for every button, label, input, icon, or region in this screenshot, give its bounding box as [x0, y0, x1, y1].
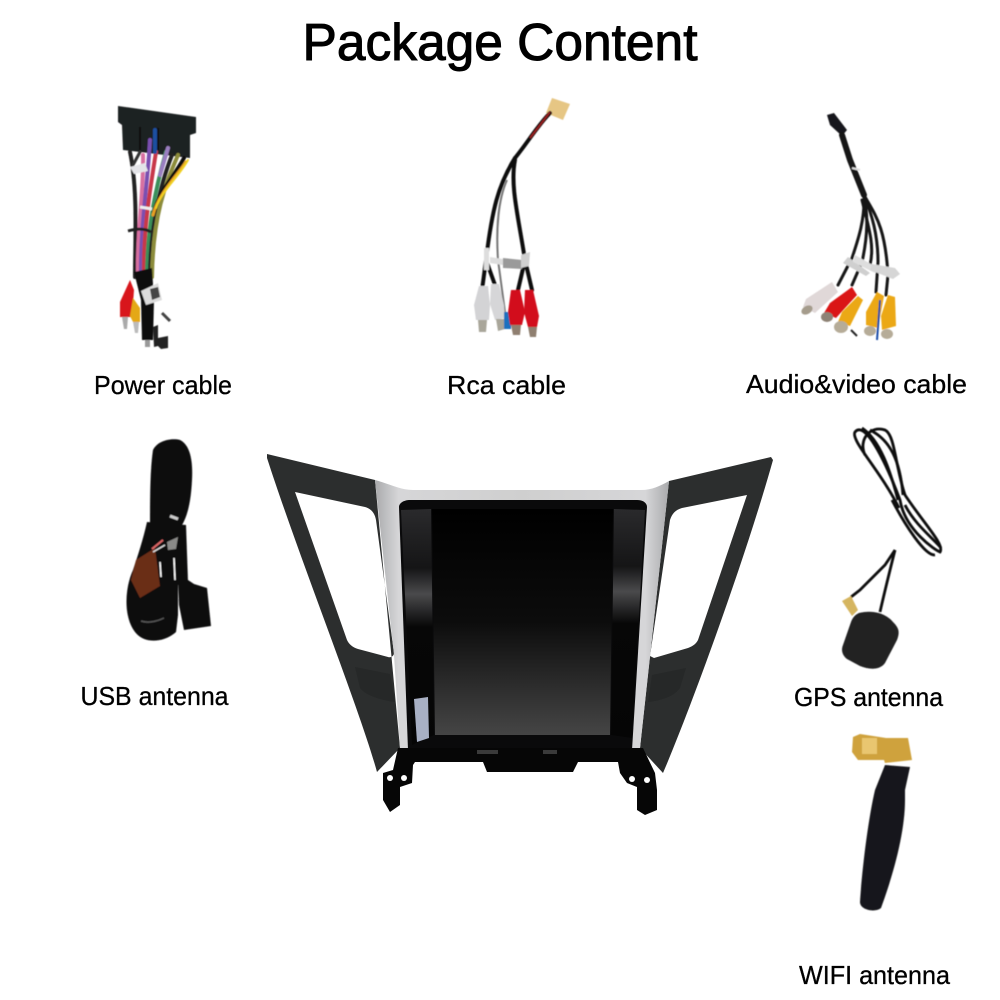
rca top connector [546, 98, 570, 120]
gps gold connector [842, 596, 858, 616]
item: audio video cable [800, 113, 900, 340]
usb coil gaps [160, 558, 175, 580]
right wing pocket [648, 668, 686, 702]
av cables [838, 135, 888, 295]
head unit right wing [640, 457, 773, 773]
qr sticker [414, 697, 429, 742]
bracket holes [387, 775, 650, 783]
power RCA plugs [120, 280, 134, 317]
label: rca cable: Rca cable [447, 370, 566, 400]
av labels [843, 257, 870, 276]
item: usb cable [126, 439, 211, 641]
wifi black body [860, 765, 910, 910]
power cable ties and labels [130, 163, 148, 174]
rca red plugs [508, 290, 525, 325]
power connector [118, 106, 196, 158]
av white plug [803, 282, 838, 313]
bottom clips [477, 750, 557, 754]
av yellow plugs [838, 296, 863, 326]
item: power cable [118, 106, 196, 349]
power wire bundle [130, 130, 188, 277]
av connector [827, 113, 847, 136]
item: head unit [267, 454, 773, 815]
head unit black frame [399, 500, 647, 750]
av blue wire [877, 300, 880, 340]
wifi gold connector [852, 734, 912, 763]
item: wifi antenna [852, 734, 912, 910]
right side glass [611, 509, 645, 738]
rca blue tag [504, 312, 511, 329]
title: Package Content [302, 13, 698, 71]
left side glass [401, 509, 434, 745]
power breakout [134, 268, 154, 340]
label: gps antenna: GPS antenna [794, 682, 944, 712]
usb lower coil [126, 522, 188, 641]
item: gps antenna [842, 428, 941, 669]
usb brown connector [131, 548, 160, 598]
usb upper coil [150, 439, 192, 526]
head unit left wing [267, 454, 400, 772]
label: power cable: Power cable [94, 370, 232, 400]
rca white plugs [474, 286, 490, 320]
rca cables [482, 113, 550, 290]
mounting bracket [383, 748, 657, 815]
item: rca cable [474, 98, 570, 337]
label: usb antenna: USB antenna [80, 681, 229, 711]
gps puck [842, 612, 899, 669]
head unit silver frame [375, 480, 669, 748]
left wing pocket [355, 667, 395, 702]
rca labels [484, 248, 509, 270]
gps cable coil [851, 428, 941, 612]
label: wifi antenna: WIFI antenna [799, 960, 951, 990]
screen [432, 509, 613, 735]
usb cable tie [170, 516, 178, 519]
av red plug [824, 287, 857, 318]
usb tail [178, 580, 211, 630]
label: audio video cable: Audio&video cable [746, 369, 967, 399]
